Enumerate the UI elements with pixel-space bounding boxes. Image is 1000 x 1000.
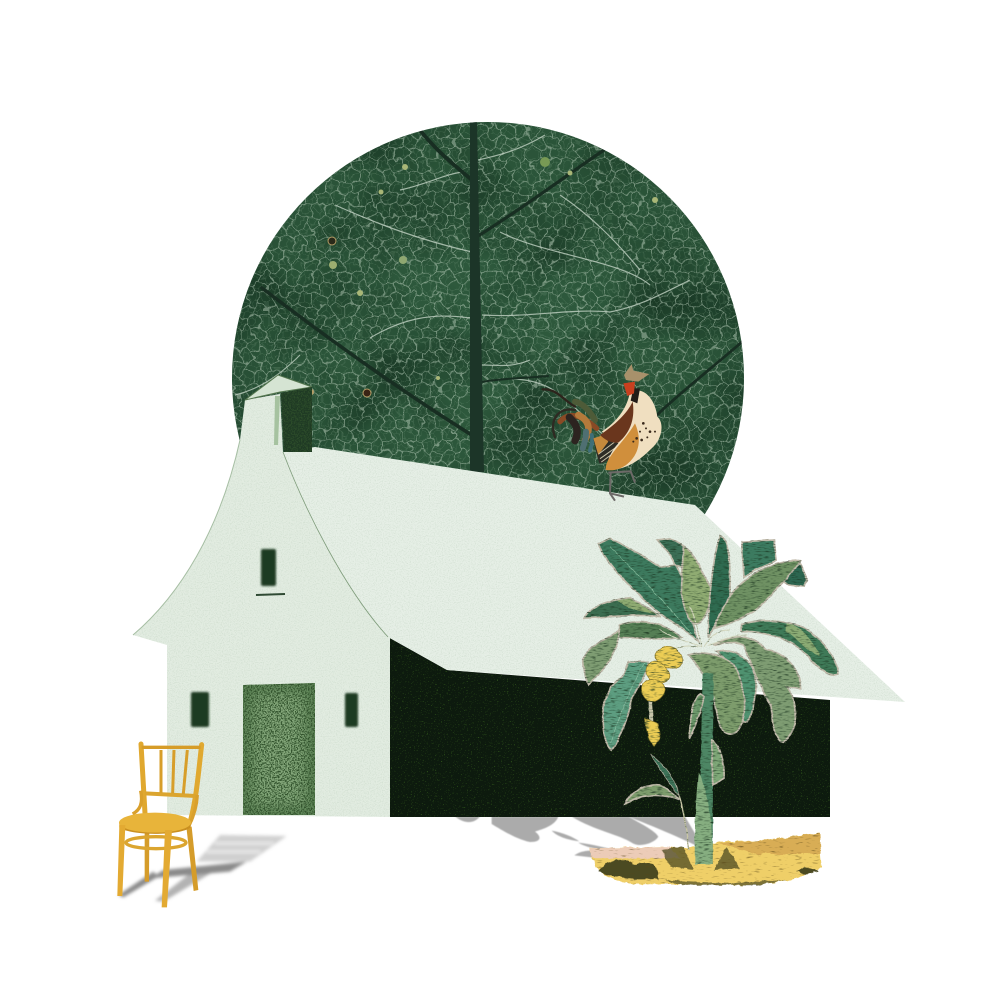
leaf dark mottling — [235, 122, 744, 498]
right droop leaf — [713, 637, 801, 742]
trunk pale base — [695, 773, 713, 864]
leaf texture circle — [232, 122, 744, 514]
trunk lower leaf — [712, 740, 724, 785]
leaf midribs — [610, 547, 747, 743]
shadow frond streak — [552, 831, 579, 841]
banana tree — [583, 535, 838, 864]
mid rail — [145, 793, 196, 796]
chimney dark fill — [280, 386, 313, 453]
roof — [283, 447, 905, 702]
back posts — [141, 744, 202, 820]
top dark leaf — [657, 538, 685, 567]
ground scrub — [598, 847, 818, 885]
upper left pale — [617, 598, 655, 614]
rooster wing — [593, 435, 622, 463]
shadow slats — [207, 843, 273, 852]
shadow low tip — [574, 851, 592, 857]
farmhouse — [133, 375, 905, 818]
ground patch — [589, 833, 822, 885]
right window — [345, 693, 358, 727]
shadow frond right — [628, 817, 697, 846]
gable left edge shading — [133, 440, 240, 635]
leaf base colour — [232, 122, 744, 514]
shadow seat — [150, 862, 247, 878]
rooster — [543, 364, 662, 501]
sapling upper leaf — [651, 755, 679, 797]
leaf vein mesh — [232, 122, 744, 512]
rooster speckles — [632, 422, 656, 443]
door — [243, 683, 315, 815]
rooster body — [602, 391, 662, 470]
dark wall speckle — [388, 637, 830, 817]
banana stalk — [650, 702, 652, 727]
door grain — [243, 683, 315, 815]
mid left leaf — [618, 622, 682, 639]
shadow frond centre — [572, 817, 658, 845]
spindles — [161, 750, 187, 794]
sapling lower leaf — [625, 785, 679, 804]
left droop leaf — [583, 629, 619, 685]
dark side wall — [388, 637, 830, 817]
chimney grain — [280, 386, 313, 453]
back right tip — [780, 563, 807, 587]
rooster head — [623, 382, 635, 396]
left window — [191, 692, 209, 727]
door dark border — [243, 683, 315, 815]
pale fold leaf — [682, 547, 711, 624]
shadow rear leg — [118, 872, 158, 897]
gable front wall — [133, 394, 390, 817]
centre droop leaf — [688, 653, 745, 734]
shadow low frond — [578, 843, 618, 851]
arm braces — [133, 791, 197, 825]
rooster crest — [624, 364, 649, 382]
window sill mark — [256, 594, 285, 595]
shadow back frame — [197, 835, 287, 862]
shadow frond left — [455, 817, 480, 822]
rooster wing tan — [593, 435, 608, 455]
chair cast shadow — [118, 835, 287, 902]
right long leaf pale — [786, 623, 820, 655]
leaf fine vein mesh — [232, 122, 744, 512]
trunk hanging leaf — [689, 693, 704, 738]
door shaded edges — [243, 683, 315, 815]
rooster neck hackle — [631, 388, 640, 403]
house cast shadow — [455, 817, 697, 857]
rooster belly shading — [606, 423, 639, 470]
seat — [119, 813, 191, 833]
ground pink sky band — [589, 847, 680, 858]
ground far hill — [717, 833, 821, 854]
bentwood chair — [117, 744, 202, 907]
chimney cap — [245, 375, 312, 400]
rooster wing stripes — [599, 441, 621, 462]
paper grain — [133, 375, 905, 818]
trunk — [695, 673, 713, 864]
green centre leaf — [717, 651, 756, 723]
rooster tail — [543, 389, 597, 451]
back right leaf — [742, 540, 777, 577]
gable edge shading — [283, 452, 388, 637]
right big leaf — [715, 561, 801, 628]
right long leaf — [742, 621, 838, 675]
seat rim — [119, 823, 191, 834]
top rail — [142, 742, 201, 752]
shadow frond large — [492, 817, 558, 842]
rooster brown breast — [600, 402, 633, 443]
large top left leaf — [598, 538, 698, 642]
back legs — [145, 827, 198, 891]
banana bunches — [642, 646, 683, 746]
pale secondary veins — [235, 135, 690, 440]
leaf blemish spots — [308, 157, 658, 397]
upper window — [261, 549, 276, 586]
ground yellow soil — [589, 833, 822, 885]
sapling stem — [679, 797, 689, 850]
front legs — [117, 825, 172, 907]
rooster legs — [608, 471, 635, 501]
shadow front leg — [155, 872, 213, 902]
central upright leaf — [708, 535, 730, 638]
dark primary side veins — [262, 122, 750, 434]
chimney streak — [274, 396, 280, 445]
upper left leaf — [584, 598, 661, 618]
chimney dark side — [280, 386, 313, 453]
lower left teal leaf — [603, 662, 648, 751]
leg ring — [126, 837, 186, 849]
leaf midrib — [470, 122, 484, 472]
